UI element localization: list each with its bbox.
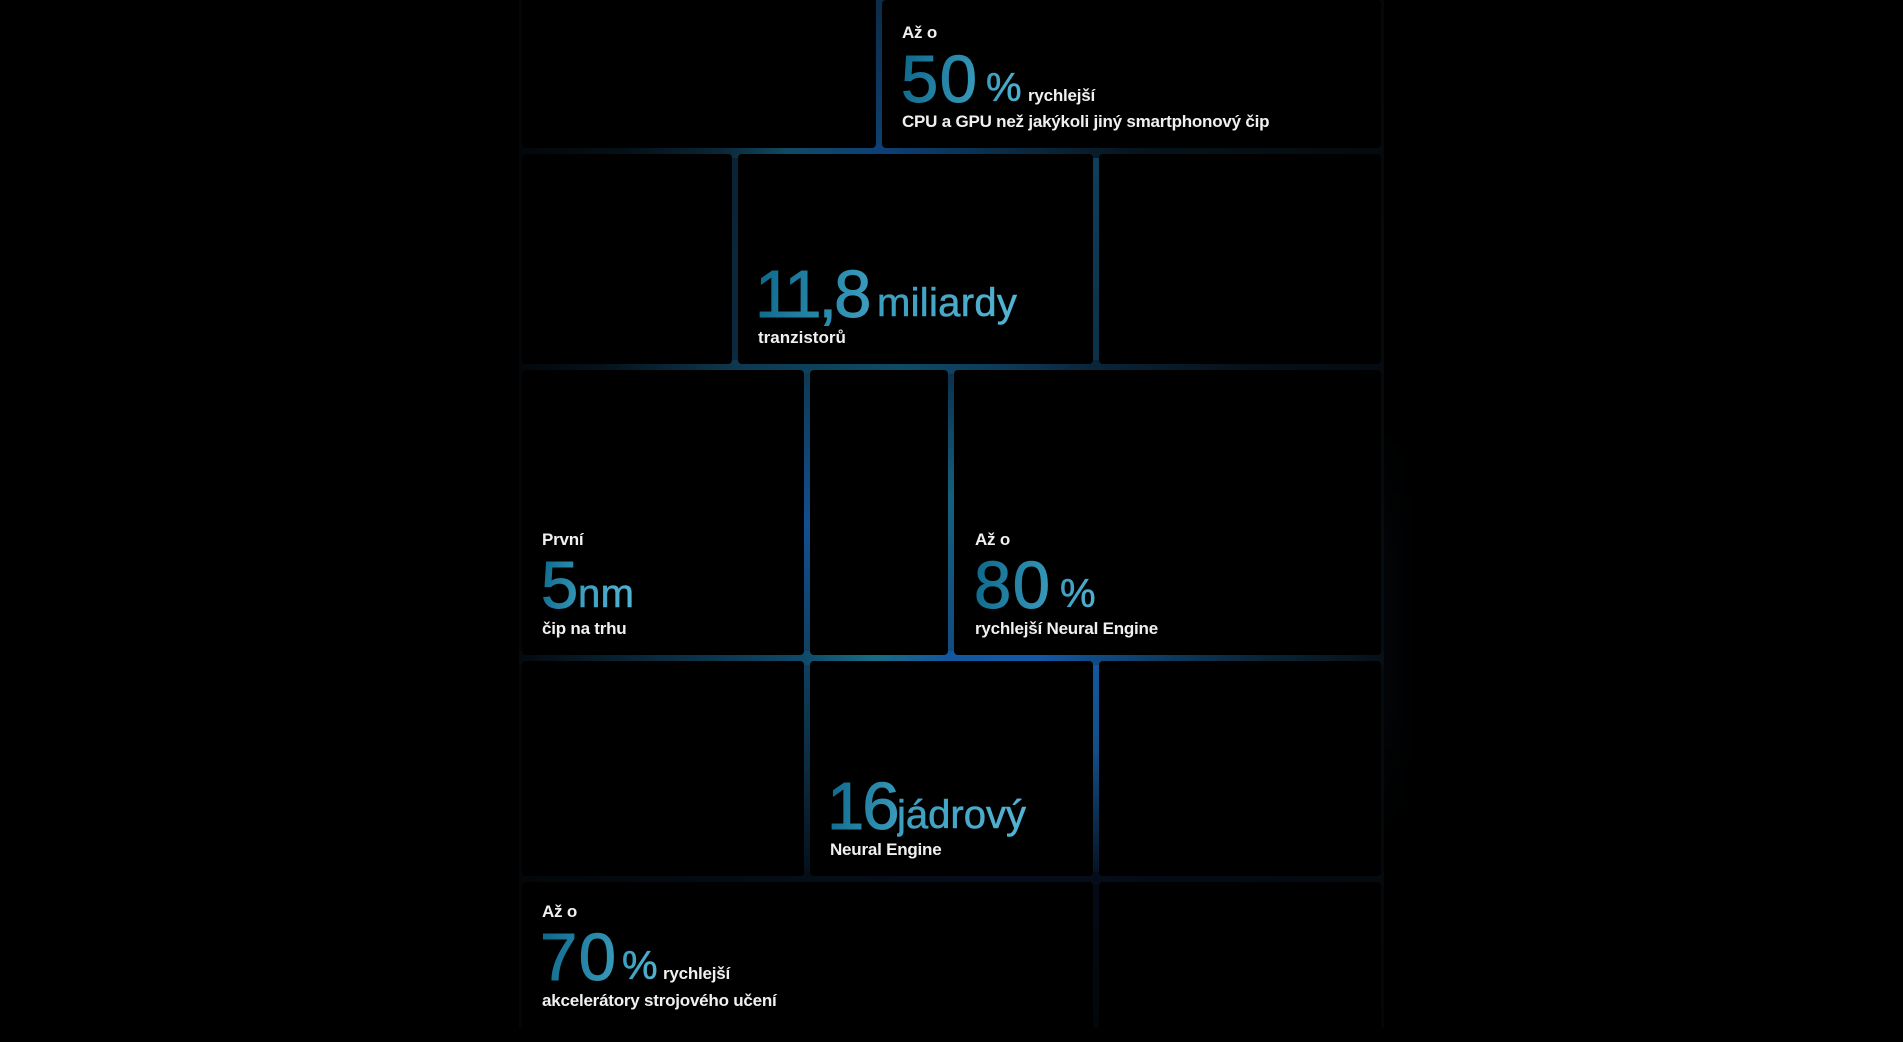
grid line: horizontal 1 <box>519 144 1384 158</box>
grid line: vertical row 3 right <box>944 366 958 658</box>
stat: 11,8: 11,8 <box>755 257 868 332</box>
text: intro: Až o <box>902 23 937 42</box>
grid line: vertical row 3 left <box>800 366 814 658</box>
text: chip on the market: čip na trhu <box>542 619 626 638</box>
panel: empty row 2 left <box>522 154 732 364</box>
panel: 50 % faster CPU and GPU <box>882 0 1381 148</box>
grid line: vertical row 2 right <box>1089 150 1103 366</box>
grid line: horizontal 2 <box>519 360 1384 374</box>
text: intro: Až o <box>542 902 577 921</box>
text: first: První <box>542 530 583 549</box>
text: description: CPU a GPU než jakýkoli jiný smartphonový čip <box>902 112 1269 131</box>
panel: 80 % faster Neural Engine <box>954 370 1381 655</box>
stat unit: percent: % <box>1060 572 1096 616</box>
background glow right edge <box>1384 420 1414 840</box>
text: Neural Engine: Neural Engine <box>830 840 941 859</box>
stat: 5: 5 <box>541 548 580 623</box>
grid line: outer left <box>519 0 526 1028</box>
grid line: vertical row 4 right <box>1089 658 1103 880</box>
grid line: vertical row 2 left <box>728 150 742 366</box>
panel: 11,8 billion transistors <box>738 154 1093 364</box>
panel: empty row 4 right <box>1099 661 1381 876</box>
panel: empty row 4 left <box>522 661 804 876</box>
stat unit: percent: % <box>622 944 658 988</box>
stat unit: nm: nm <box>578 572 634 616</box>
text: description: rychlejší Neural Engine <box>975 619 1158 638</box>
text: description: akcelerátory strojového učení <box>542 991 777 1010</box>
stat: 70: 70 <box>540 920 618 995</box>
panel: empty row 2 right <box>1099 154 1381 364</box>
grid line: vertical row 5 <box>1089 878 1103 1028</box>
panel: empty row 3 middle <box>810 370 948 655</box>
text: transistors: tranzistorů <box>758 328 846 347</box>
stat unit: percent: % <box>986 66 1022 110</box>
text: faster: rychlejší <box>1028 86 1095 105</box>
text: intro: Až o <box>975 530 1010 549</box>
text: faster: rychlejší <box>663 964 730 983</box>
grid line: outer right <box>1377 0 1384 1028</box>
panel: first 5 nm chip <box>522 370 804 655</box>
grid line: horizontal 4 <box>519 872 1384 886</box>
grid line: vertical row 4 left <box>800 658 814 880</box>
stat unit: core: jádrový <box>897 793 1026 837</box>
panel: empty row 5 right <box>1099 882 1381 1042</box>
grid line: vertical top <box>872 0 886 150</box>
panel: empty top left <box>522 0 876 148</box>
grid line: horizontal 3 <box>519 651 1384 665</box>
stat: 80: 80 <box>974 548 1052 623</box>
stat: 16: 16 <box>827 769 898 844</box>
stat unit: miliardy: miliardy <box>877 281 1017 325</box>
stat: 50: 50 <box>901 42 979 117</box>
panel: 70 % faster ML accelerators <box>522 882 1093 1042</box>
panel: 16-core Neural Engine <box>810 661 1093 876</box>
